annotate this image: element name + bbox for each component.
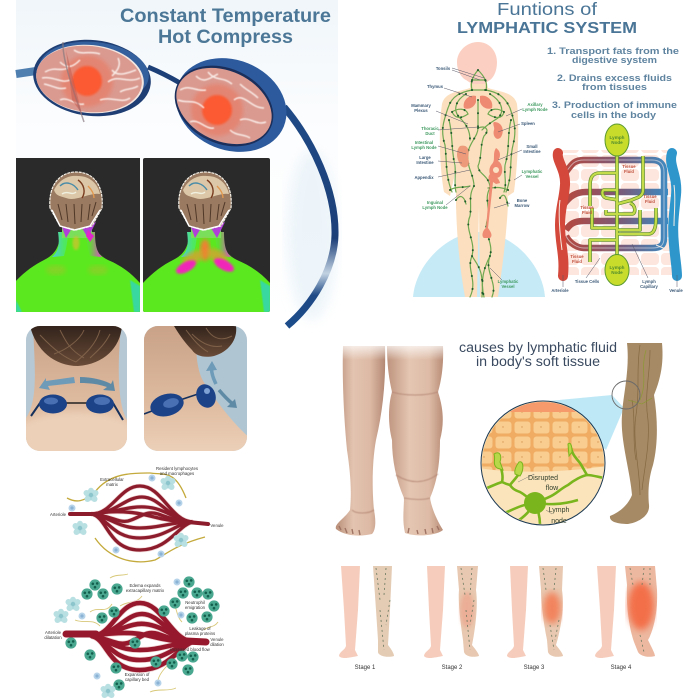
labels: Expansion of bbox=[125, 672, 150, 677]
lymph nodes bbox=[605, 124, 629, 286]
body diagram: Lymph Node bbox=[422, 205, 448, 210]
device bbox=[31, 394, 123, 420]
arrow: vertical tilt bbox=[210, 370, 232, 404]
stage 4: Stage 4 bbox=[611, 665, 632, 671]
inset labels: node bbox=[551, 518, 567, 525]
labels: plasma proteins bbox=[185, 631, 215, 636]
organ labels: Bone bbox=[517, 198, 528, 203]
labels: matrix bbox=[106, 482, 119, 487]
fluid labels: Fluid bbox=[582, 210, 592, 215]
body diagram: Thoracic bbox=[421, 126, 439, 131]
stage 3: Stage 3 bbox=[524, 665, 545, 671]
lymph nodes: Lymph bbox=[610, 135, 625, 140]
body diagram: Inguinal bbox=[427, 200, 443, 205]
labels: Edema expands bbox=[129, 583, 161, 588]
fluid labels: Tissue bbox=[643, 194, 657, 199]
capillary vessels bbox=[66, 603, 206, 670]
thermal body bbox=[143, 232, 270, 314]
functions list: digestive system bbox=[572, 55, 657, 66]
lymphatic vessels bbox=[443, 70, 515, 297]
organ labels: Marrow bbox=[515, 203, 530, 208]
lymph capillaries bbox=[590, 150, 656, 262]
labels: Venule bbox=[210, 523, 224, 528]
lymph nodes: Lymph bbox=[610, 265, 625, 270]
functions list: cells in the body bbox=[571, 110, 657, 121]
fluid labels: Fluid bbox=[645, 199, 655, 204]
panel: functions of lymphatic system bbox=[411, 0, 683, 297]
heading: LYMPHATIC SYSTEM bbox=[457, 20, 637, 37]
organ labels: Intestine bbox=[416, 160, 434, 165]
body diagram bbox=[411, 42, 548, 297]
title: constant temperature hot compress: Hot Compress bbox=[158, 27, 293, 48]
caption labels bbox=[551, 279, 683, 293]
stage 1 bbox=[339, 566, 394, 671]
labels bbox=[50, 466, 224, 528]
swollen leg bbox=[387, 346, 443, 535]
labels: Leakage of bbox=[189, 626, 211, 631]
right lens bbox=[161, 42, 301, 168]
stage 2: Stage 2 bbox=[442, 665, 463, 671]
extracellular fibres bbox=[67, 473, 205, 562]
arrow: horizontal rotation bbox=[39, 377, 115, 391]
organ labels: Mammary bbox=[411, 103, 431, 108]
labels: extracapillary matrix bbox=[126, 588, 165, 593]
head bbox=[179, 172, 231, 230]
labels bbox=[44, 583, 224, 682]
arteriole bbox=[558, 153, 565, 276]
head bbox=[50, 172, 102, 230]
immune cells bbox=[68, 474, 188, 558]
body silhouette bbox=[440, 78, 518, 297]
labels: Increased blood flow bbox=[170, 647, 211, 652]
functions list: from tissues bbox=[582, 82, 647, 93]
title: constant temperature hot compress bbox=[120, 6, 331, 48]
fluid labels: Tissue bbox=[570, 254, 584, 259]
inset labels: flow bbox=[546, 485, 559, 492]
diagram: normal capillary bed bbox=[50, 466, 224, 562]
leg bbox=[610, 343, 663, 524]
organ labels bbox=[411, 66, 541, 208]
organ labels: Intestine bbox=[523, 149, 541, 154]
caption labels: Arteriole bbox=[551, 288, 569, 293]
icon: eye pad device bbox=[16, 34, 335, 326]
organ labels: Thymus bbox=[427, 84, 444, 89]
body diagram: Duct bbox=[425, 131, 435, 136]
body diagram: Vessel bbox=[525, 174, 539, 179]
caption labels: Venule bbox=[669, 288, 683, 293]
body diagram: Lymphatic bbox=[522, 169, 543, 174]
organ labels: Large bbox=[419, 155, 431, 160]
diagram: inflamed capillary bed bbox=[44, 574, 224, 698]
capillary diagram bbox=[551, 124, 683, 293]
lymph nodes: Node bbox=[611, 140, 623, 145]
heat blobs bbox=[174, 239, 236, 277]
labels: emigration bbox=[185, 605, 206, 610]
labels: Neutrophil bbox=[185, 600, 205, 605]
panel: lymphedema stages bbox=[339, 566, 657, 671]
organ labels: Appendix bbox=[414, 175, 434, 180]
panel: thermal image after bbox=[143, 158, 270, 314]
neutrophils and cells bbox=[54, 576, 220, 698]
stage 3 bbox=[507, 566, 563, 671]
heading bbox=[457, 0, 637, 37]
panel: thermal image before bbox=[14, 158, 140, 314]
capillary vessels bbox=[70, 486, 208, 550]
functions list: 3. Production of immune bbox=[552, 100, 677, 111]
device bbox=[144, 384, 216, 416]
labels: dilation bbox=[210, 642, 224, 647]
body diagram: Lymph Node bbox=[522, 107, 548, 112]
leader lines bbox=[436, 68, 522, 280]
organ labels: Small bbox=[526, 144, 538, 149]
photo: swollen legs bbox=[335, 340, 450, 536]
stage 1: Stage 1 bbox=[355, 665, 376, 671]
stage 4 bbox=[595, 566, 657, 671]
labels: Arteriole bbox=[50, 512, 67, 517]
heading: causes by lymphatic fluid: causes by lymphatic fluid bbox=[459, 340, 617, 355]
thermal body bbox=[16, 238, 140, 312]
photo: device on neck, back view bbox=[26, 326, 127, 451]
inset labels: Lymph bbox=[549, 507, 569, 514]
heading: causes by lymphatic fluid: in body's soft tissue bbox=[476, 354, 600, 369]
zoom cone bbox=[548, 395, 624, 450]
labels: Venule bbox=[210, 637, 224, 642]
panel: constant temperature hot compress bbox=[16, 0, 338, 328]
caption labels: Tissue Cells bbox=[575, 279, 600, 284]
functions list: 1. Transport fats from the bbox=[547, 46, 679, 57]
caption labels: Lymph bbox=[642, 279, 656, 284]
body diagram: Vessel bbox=[501, 284, 515, 289]
fluid labels: Fluid bbox=[624, 169, 634, 174]
fluid labels bbox=[570, 164, 657, 264]
blood capillaries bbox=[564, 160, 668, 248]
lymph nodes: Node bbox=[611, 270, 623, 275]
labels: Arteriole bbox=[45, 630, 62, 635]
inset labels: Disrupted bbox=[528, 475, 558, 482]
body diagram: Intestinal bbox=[415, 140, 433, 145]
labels: and macrophages bbox=[160, 471, 194, 476]
fibres bbox=[75, 574, 218, 692]
organ labels: Tonsils bbox=[436, 66, 451, 71]
strap bbox=[284, 107, 335, 326]
left lens bbox=[29, 34, 155, 122]
heading: causes by lymphatic fluid bbox=[459, 340, 617, 369]
stage 2 bbox=[424, 566, 479, 671]
inset circle bbox=[480, 400, 606, 530]
functions list bbox=[547, 46, 679, 121]
organ labels: Spleen bbox=[521, 121, 535, 126]
fluid labels: Tissue bbox=[622, 164, 636, 169]
body diagram: Lymph Node bbox=[411, 145, 437, 150]
title: constant temperature hot compress: Constant Temperature bbox=[120, 6, 331, 27]
labels: dilatation bbox=[44, 635, 62, 640]
normal leg bbox=[336, 346, 385, 536]
functions list: 2. Drains excess fluids bbox=[557, 73, 672, 84]
lymph vessels bbox=[487, 448, 604, 526]
caption labels: Capillary bbox=[640, 284, 659, 289]
labels: Extracellular bbox=[100, 477, 124, 482]
fluid labels: Fluid bbox=[572, 259, 582, 264]
labels: Resident lymphocytes bbox=[156, 466, 198, 471]
inset labels bbox=[528, 475, 569, 525]
photo: device on neck, side view bbox=[144, 326, 250, 451]
organs bbox=[457, 96, 503, 238]
body diagram: Lymphatic bbox=[498, 279, 519, 284]
venule bbox=[671, 153, 677, 276]
illustration: magnified lymph blockage bbox=[480, 343, 663, 530]
fluid labels: Tissue bbox=[580, 205, 594, 210]
magnifier circle bbox=[612, 381, 640, 409]
labels: capillary bed bbox=[125, 677, 150, 682]
body diagram: Axillary bbox=[527, 102, 543, 107]
organ labels: Plexus bbox=[414, 108, 428, 113]
